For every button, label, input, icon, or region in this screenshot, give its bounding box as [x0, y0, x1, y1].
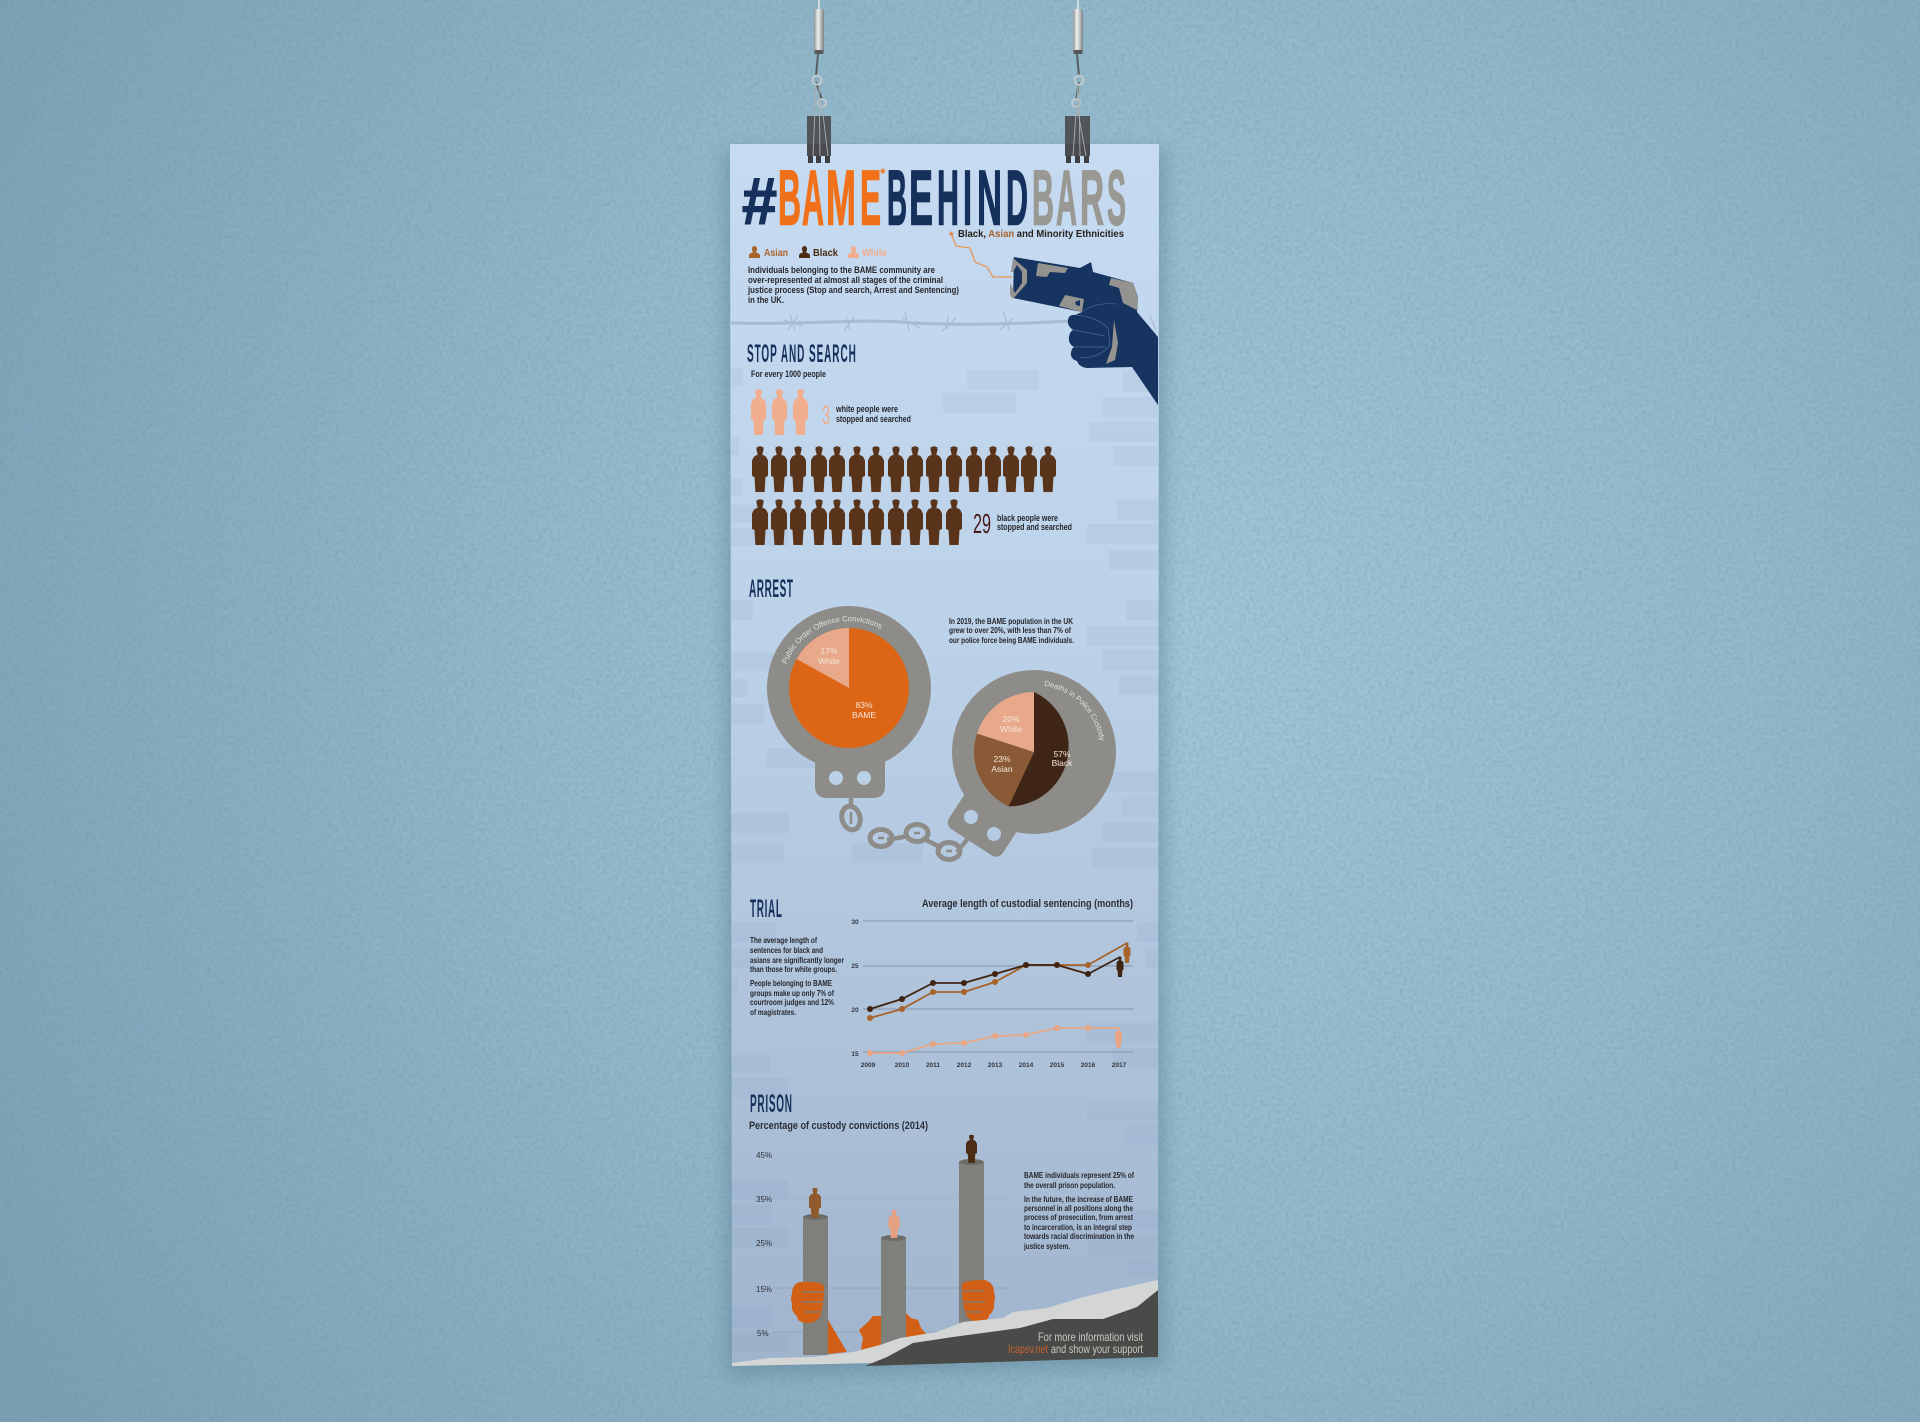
prison note [1023, 1170, 1134, 1251]
y axis labels: 35% [756, 1195, 772, 1204]
fist left [791, 1282, 824, 1323]
title: N [977, 154, 1002, 242]
arrest note: our police force being BAME individuals. [949, 635, 1074, 645]
footer call to action [1008, 1330, 1144, 1356]
line chart: custodial sentencing: 25 [851, 963, 859, 970]
poster sheet [730, 144, 1159, 1366]
line chart: custodial sentencing: 2013 [988, 1062, 1003, 1069]
title: M [826, 154, 856, 242]
arrest note [949, 616, 1074, 645]
trial note [750, 935, 845, 1017]
line chart: custodial sentencing: 2011 [926, 1062, 940, 1069]
intro text: justice process (Stop and search, Arrest and Sentencing) [747, 285, 959, 296]
left cuff pie: public order offence convictions: 83% [855, 700, 873, 710]
prison note: process of prosecution, from arrest [1024, 1212, 1133, 1222]
label: white people stopped: stopped and searched [836, 414, 911, 424]
y axis labels: 5% [757, 1329, 769, 1338]
title: I [963, 154, 972, 242]
bar: black [959, 1135, 984, 1330]
right cuff pie: deaths in police custody: Black [1052, 758, 1073, 768]
trial note: asians are significantly longer [750, 955, 845, 965]
heading: trial: TRIAL [750, 896, 782, 924]
prison note: towards racial discrimination in the [1024, 1231, 1134, 1241]
black pictogram row 1 [752, 446, 1056, 492]
section: arrest [749, 576, 1116, 862]
caption: per 1000 people: For every 1000 people [751, 369, 826, 379]
prison note: justice system. [1023, 1241, 1070, 1251]
barbed wire [731, 312, 1156, 331]
heading: prison: PRISON [750, 1091, 792, 1119]
right cuff pie: deaths in police custody [948, 670, 1116, 857]
text: S [1107, 154, 1126, 242]
intro text: in the UK. [748, 295, 784, 306]
bar: asian [803, 1188, 828, 1355]
title: B [887, 154, 907, 242]
label: black people stopped: black people were [997, 513, 1058, 523]
title: B [778, 154, 801, 242]
intro text [747, 265, 959, 306]
right cuff pie: deaths in police custody: 20% [1002, 714, 1020, 724]
legend: Asian [764, 247, 788, 259]
hanger clip left [807, 0, 831, 163]
prison note: the overall prison population. [1024, 1180, 1115, 1190]
left cuff pie: public order offence convictions: White [818, 656, 840, 666]
trial note: sentences for black and [750, 945, 823, 955]
title: D [1006, 154, 1028, 242]
arrest note: In 2019, the BAME population in the UK [949, 616, 1074, 626]
footer call to action: Icapsv.net [1008, 1342, 1048, 1356]
series: black [867, 957, 1124, 1012]
bar chart title: Percentage of custody convictions (2014) [749, 1120, 928, 1132]
title: * [880, 165, 886, 181]
bar: white [881, 1210, 906, 1350]
trial note: The average length of [750, 935, 817, 945]
line chart: custodial sentencing: 2009 [861, 1062, 876, 1069]
prison note: BAME individuals represent 25% of [1024, 1170, 1134, 1180]
footer call to action: For more information visit [1038, 1330, 1144, 1344]
subtitle: acronym definition: Black, Asian and Minority Ethnicities [958, 228, 1124, 240]
white pictogram row [751, 389, 808, 435]
left cuff pie: public order offence convictions: Public Order Offence Convictions [782, 616, 882, 664]
hanger clip right [1065, 0, 1090, 163]
label: black people stopped: stopped and searched [997, 522, 1072, 532]
taser in hand [1010, 257, 1158, 405]
title: H [937, 154, 959, 242]
line chart: custodial sentencing: 2016 [1081, 1062, 1096, 1069]
title: A [802, 154, 824, 242]
line chart: custodial sentencing: 2014 [1019, 1062, 1034, 1069]
left cuff pie: public order offence convictions [767, 606, 931, 798]
line chart: custodial sentencing [851, 898, 1133, 1069]
prison note: to incarceration, is an integral step [1024, 1222, 1132, 1232]
line chart: custodial sentencing: 15 [851, 1051, 859, 1058]
title: R [1080, 154, 1104, 242]
escaping arms behind bars [827, 1313, 962, 1354]
right cuff pie: deaths in police custody: 57% [1053, 749, 1071, 759]
right cuff pie: deaths in police custody: Deaths in Police Custody [1044, 680, 1104, 740]
line chart: custodial sentencing: 20 [851, 1007, 859, 1014]
line chart: custodial sentencing: 30 [851, 919, 859, 926]
line chart: custodial sentencing: 2017 [1112, 1062, 1127, 1069]
left cuff pie: public order offence convictions: 17% [820, 646, 838, 656]
label: white people stopped [835, 404, 911, 424]
orange wire from asterisk to taser: * [949, 229, 954, 243]
trial note: of magistrates. [750, 1007, 796, 1017]
title [742, 154, 1126, 242]
handcuff chain [839, 796, 970, 860]
footer call to action: and show your support [1051, 1342, 1144, 1356]
title: E [909, 154, 933, 242]
y axis labels [756, 1151, 772, 1338]
heading: arrest: ARREST [749, 576, 793, 604]
line chart: custodial sentencing: Average length of custodial sentencing (months) [922, 898, 1133, 910]
line chart: custodial sentencing: 2015 [1050, 1062, 1065, 1069]
line chart: custodial sentencing: 2010 [895, 1062, 910, 1069]
intro text: Individuals belonging to the BAME community are [748, 265, 935, 276]
title: A [1056, 154, 1077, 242]
section: stop and search [747, 341, 1072, 545]
stat: 29: 29 [973, 508, 991, 539]
prison note: In the future, the increase of BAME [1024, 1194, 1133, 1204]
orange wire from asterisk to taser [949, 229, 1012, 277]
right cuff pie: deaths in police custody: White [1000, 724, 1022, 734]
intro text: over-represented at almost all stages of the criminal [748, 275, 943, 286]
legend: White [862, 247, 887, 259]
y axis labels: 25% [756, 1239, 772, 1248]
section: prison [749, 1091, 1134, 1355]
series: asian [867, 943, 1130, 1021]
legend: Black [813, 247, 838, 259]
heading: stop and search: STOP AND SEARCH [747, 341, 856, 369]
background bricks [731, 368, 1159, 1352]
right cuff pie: deaths in police custody: 23% [993, 754, 1011, 764]
trial note: courtroom judges and 12% [750, 997, 834, 1007]
y axis labels: 15% [756, 1285, 772, 1294]
arrest note: grew to over 20%, with less than 7% of [949, 625, 1071, 635]
series: white [867, 1025, 1122, 1056]
trial note: groups make up only 7% of [750, 988, 834, 998]
right cuff pie: deaths in police custody: Asian [991, 764, 1013, 774]
title: B [1032, 154, 1054, 242]
section: trial [750, 896, 1133, 1069]
legend [749, 246, 887, 259]
black pictogram row 2 [752, 499, 962, 545]
label: black people stopped [997, 513, 1072, 532]
line chart: custodial sentencing: 2012 [957, 1062, 972, 1069]
prison note: personnel in all positions along the [1024, 1203, 1133, 1213]
poster shadow [724, 150, 1166, 1376]
torn paper footer [732, 1280, 1158, 1366]
title: # [742, 164, 777, 238]
title: E [860, 154, 881, 242]
left cuff pie: public order offence convictions: BAME [852, 710, 876, 720]
trial note: People belonging to BAME [750, 978, 832, 988]
trial note: than those for white groups. [750, 964, 837, 974]
stat: 3: 3 [822, 400, 830, 430]
y axis labels: 45% [756, 1151, 772, 1160]
label: white people stopped: white people were [835, 404, 898, 414]
fist right [962, 1280, 995, 1322]
